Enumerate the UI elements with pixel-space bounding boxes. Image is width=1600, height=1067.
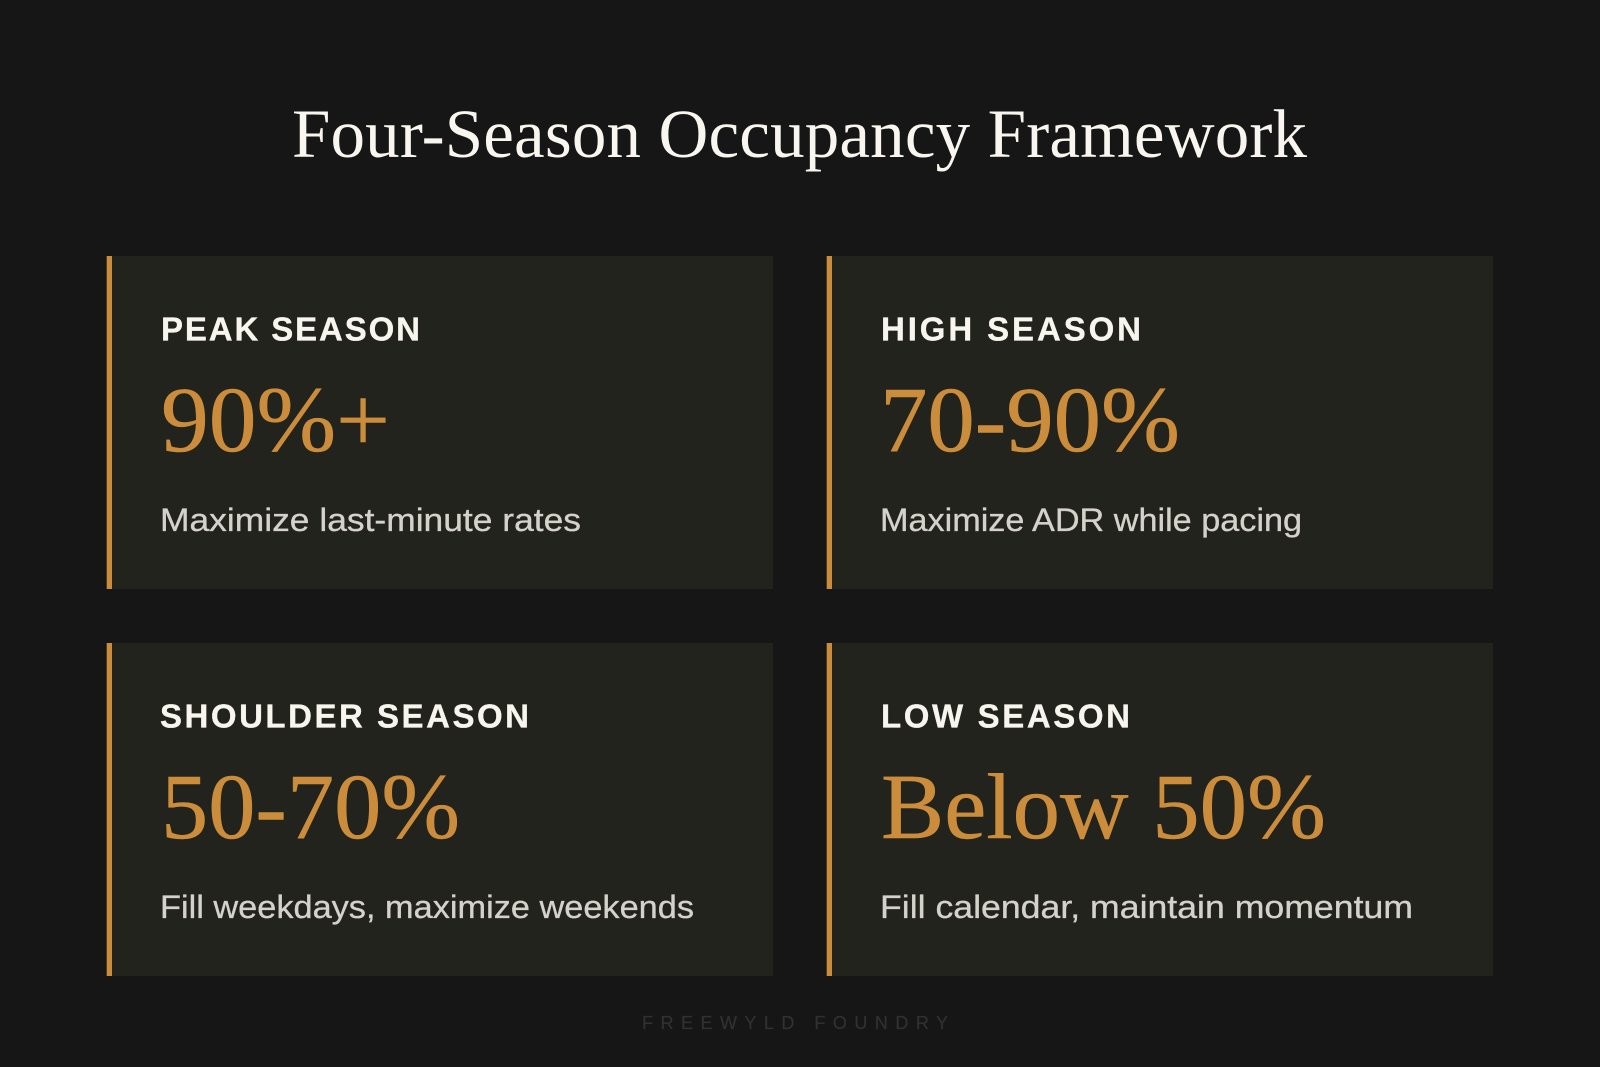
panel: shoulder season [107, 643, 773, 976]
heading: shoulder season: SHOULDER SEASON [160, 698, 529, 734]
description: low season: Fill calendar, maintain momentum [880, 889, 1413, 925]
stat: 90%+: 90%+ [161, 369, 390, 472]
description: high season: Maximize ADR while pacing [880, 502, 1302, 538]
stat: 70-90%: 70-90% [880, 369, 1180, 472]
title: Four-Season Occupancy Framework [292, 96, 1308, 172]
stat: 50-70%: 50-70% [161, 756, 460, 859]
panel: high season [827, 256, 1493, 589]
stat: below 50%: Below 50% [881, 756, 1326, 859]
description: shoulder season: Fill weekdays, maximize weekends [160, 889, 694, 925]
panel: low season [827, 643, 1493, 976]
panel: peak season [107, 256, 773, 589]
description: peak season: Maximize last-minute rates [160, 502, 581, 538]
heading: low season: LOW SEASON [881, 698, 1130, 734]
footer wordmark: FREEWYLD FOUNDRY [642, 1013, 948, 1033]
heading: peak season: PEAK SEASON [161, 310, 420, 348]
heading: high season: HIGH SEASON [881, 310, 1141, 348]
